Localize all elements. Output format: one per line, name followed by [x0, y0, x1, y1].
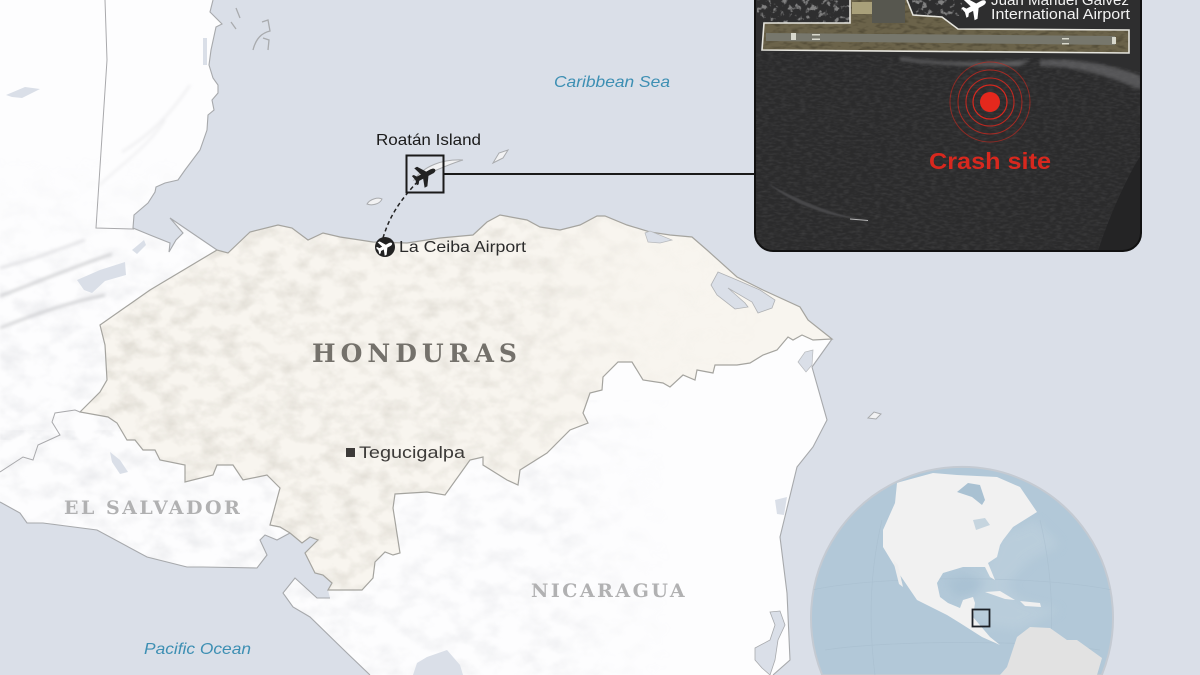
- Baja: [894, 566, 903, 587]
- Guatemala and Belize borders: [0, 0, 134, 472]
- label: Honduras: HONDURAS: [312, 339, 522, 368]
- relief: Guatemala, Belize and Mexico: [0, 85, 215, 440]
- globe locator box: [972, 610, 990, 626]
- South America: [1000, 627, 1102, 675]
- marker: La Ceiba Airport: [374, 237, 527, 258]
- connector line: [443, 173, 756, 175]
- airport footprint: [762, 0, 1129, 53]
- inset land: [771, 51, 1136, 68]
- North America: [883, 473, 1037, 645]
- label: Nicaragua: NICARAGUA: [531, 580, 687, 602]
- boat wake: [774, 187, 860, 219]
- islands: [231, 8, 881, 419]
- Honduras: [80, 210, 832, 595]
- Great Lakes: [973, 518, 990, 530]
- coastlines: [0, 0, 832, 675]
- Hudson Bay: [957, 483, 985, 505]
- flight path: [383, 178, 421, 238]
- relief: El Salvador and Nicaragua: [0, 400, 785, 675]
- label: Pacific Ocean: Pacific Ocean: [144, 641, 251, 658]
- marker: crash site rings: [950, 62, 1030, 142]
- locator box: Roatán: [406, 156, 444, 192]
- label: El Salvador: EL SALVADOR: [64, 497, 242, 519]
- label: crash site: Crash site: [929, 148, 1051, 174]
- locator globe: [811, 467, 1113, 675]
- graticule: [812, 520, 1112, 675]
- label: Caribbean Sea: Caribbean Sea: [554, 74, 670, 91]
- marker: Tegucigalpa: Tegucigalpa: [359, 443, 466, 462]
- label: airport: International Airport: [991, 6, 1131, 23]
- Caribbean islands: [985, 591, 1015, 600]
- lakes and lagoons: [6, 38, 813, 675]
- label: Roatán Island: Roatán Island: [376, 132, 481, 149]
- icon: crash plane: [409, 160, 440, 190]
- Pacific Ocean: [0, 502, 370, 675]
- marker: La Ceiba Airport: La Ceiba Airport: [399, 239, 527, 256]
- panel: satellite inset: [755, 0, 1141, 251]
- icon: airport plane: [961, 0, 986, 20]
- shallow water shading: [945, 520, 1060, 630]
